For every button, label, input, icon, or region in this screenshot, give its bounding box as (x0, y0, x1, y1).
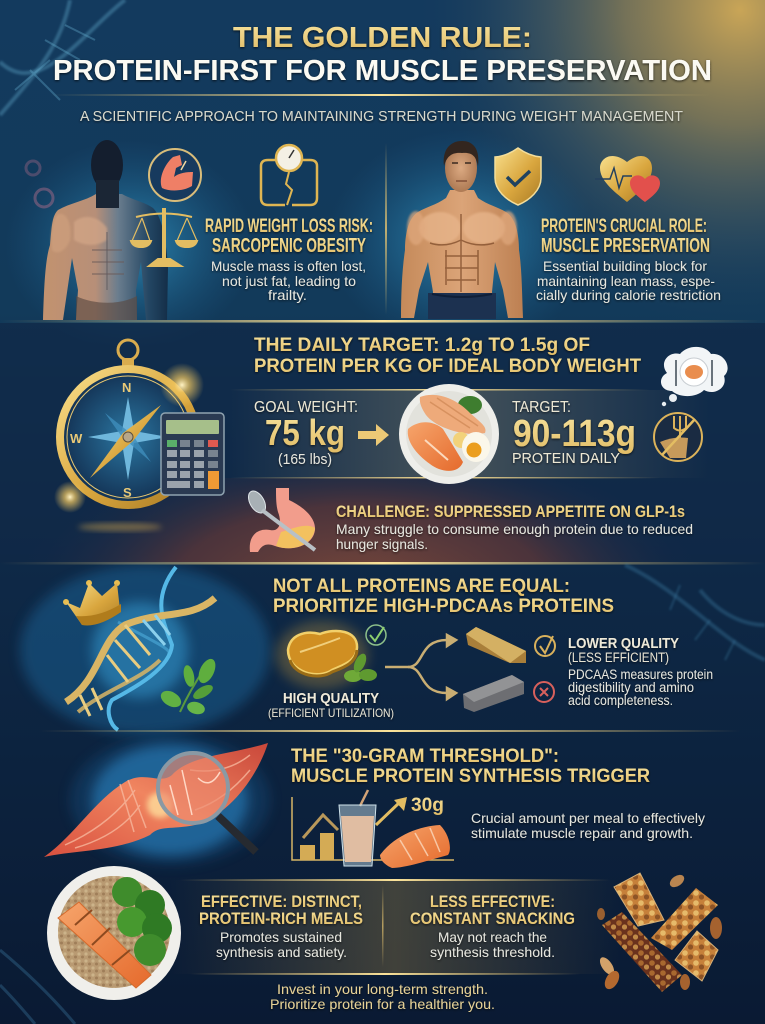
stat: target: PROTEIN DAILY (512, 450, 620, 467)
panel: rapid weight loss risk (43, 140, 373, 320)
text: threshold explanation: stimulate muscle repair and growth. (471, 825, 693, 841)
figure: shadowed man (43, 140, 168, 320)
text: protein's crucial role body: maintaining lean mass, espe- (537, 273, 715, 289)
text: challenge body: Many struggle to consume enough protein due to reduced (336, 521, 693, 537)
decorative dna bottom left (0, 950, 75, 1024)
label: lower quality (568, 635, 679, 665)
heading: less effective: CONSTANT SNACKING (410, 909, 575, 928)
heading: protein's crucial role (541, 216, 710, 257)
icon: check mark (535, 636, 555, 656)
decorative dna right (625, 565, 765, 660)
icon: balance scale (131, 208, 197, 266)
text: pdcaas explanation: PDCAAS measures protein (568, 667, 713, 682)
icon: cross mark (534, 682, 554, 702)
icon: flexed muscle in circle (149, 149, 201, 201)
text: rapid weight loss body: Muscle mass is often lost, (211, 258, 366, 274)
arrows: branching to bars (385, 635, 456, 699)
text: closing message: Invest in your long-term strength. (277, 981, 488, 997)
title: THE GOLDEN RULE: (233, 22, 532, 54)
icon: fork in hand, crossed out (654, 413, 702, 461)
icon: grey protein bar (463, 675, 524, 712)
text: rapid weight loss body (211, 258, 366, 303)
icon: snack bars and nuts (597, 872, 722, 992)
icon: high quality steak (276, 621, 386, 689)
icon: protein plate (399, 384, 499, 484)
label: lower quality: (LESS EFFICIENT) (568, 650, 669, 665)
title (53, 22, 712, 87)
panel: 30-gram threshold (44, 743, 705, 868)
stat: goal weight (254, 399, 358, 468)
panel: meal timing (47, 866, 722, 1012)
heading: rapid weight loss (205, 216, 373, 257)
icon: compass with calculator: S (123, 485, 132, 500)
chart: protein threshold (292, 790, 454, 868)
icon: stomach with spoon (245, 488, 315, 552)
icon: compass with calculator (54, 340, 224, 531)
stat: goal weight: GOAL WEIGHT: (254, 399, 358, 416)
text: challenge body: hunger signals. (336, 536, 428, 552)
panel: daily target (0, 323, 765, 563)
icon: compass with calculator: N (122, 380, 131, 395)
icon: salmon plate (47, 866, 181, 1000)
panel: protein quality (63, 565, 765, 730)
text: closing message: Prioritize protein for a healthier you. (270, 996, 495, 1012)
heading: effective (199, 892, 363, 928)
heading: less effective: LESS EFFECTIVE: (430, 892, 555, 911)
heading: effective: EFFECTIVE: DISTINCT, (201, 892, 362, 911)
text: less effective body: May not reach the (438, 929, 547, 945)
callout: appetite challenge (245, 488, 693, 552)
text: effective body: Promotes sustained (220, 929, 342, 945)
panel: protein's crucial role (401, 141, 721, 319)
icon: shield with check (495, 148, 541, 205)
text: effective body: synthesis and satiety. (216, 944, 347, 960)
text: rapid weight loss body: frailty. (268, 287, 307, 303)
text: less effective body (430, 929, 555, 960)
heading: rapid weight loss: RAPID WEIGHT LOSS RISK: (205, 216, 373, 237)
heading: 30-gram threshold (291, 746, 650, 787)
heading: proteins not equal: PRIORITIZE HIGH-PDCAAs PROTEINS (273, 596, 614, 617)
subtitle: A SCIENTIFIC APPROACH TO MAINTAINING STRENGTH DURING WEIGHT MANAGEMENT (80, 108, 683, 125)
heading: effective: PROTEIN-RICH MEALS (199, 909, 363, 928)
chart: protein threshold: 30g (411, 795, 444, 816)
icon: dna with crown and leaves (63, 567, 219, 730)
stat: goal weight: 75 kg (265, 412, 345, 453)
label: high quality: HIGH QUALITY (283, 690, 379, 707)
text: protein's crucial role body (536, 258, 721, 303)
heading: proteins not equal: NOT ALL PROTEINS ARE EQUAL: (273, 576, 570, 597)
heading: daily target: PROTEIN PER KG OF IDEAL BODY WEIGHT (254, 356, 641, 377)
text: pdcaas explanation: digestibility and amino (568, 680, 694, 695)
label: lower quality: LOWER QUALITY (568, 635, 679, 652)
heading: rapid weight loss: SARCOPENIC OBESITY (212, 235, 366, 257)
label: high quality (268, 690, 394, 720)
label: high quality: (EFFICIENT UTILIZATION) (268, 706, 394, 720)
heading: daily target (254, 335, 641, 377)
text: threshold explanation (471, 810, 705, 841)
text: rapid weight loss body: not just fat, leading to (222, 273, 356, 289)
icon: heart with pulse (595, 156, 660, 202)
icon: thought cloud with food (661, 347, 728, 406)
stat: target (512, 399, 636, 467)
decorative dna top left (0, 0, 125, 207)
text: protein's crucial role body: cially during calorie restriction (536, 287, 721, 303)
heading: 30-gram threshold: MUSCLE PROTEIN SYNTHESIS TRIGGER (291, 766, 650, 787)
callout: appetite challenge: CHALLENGE: SUPPRESSED APPETITE ON GLP-1s (336, 503, 685, 521)
heading: proteins not equal (273, 576, 614, 617)
icon: broken weighing scale (261, 145, 317, 205)
icon: gold protein bar (466, 627, 526, 663)
text: pdcaas explanation: acid completeness. (568, 693, 673, 708)
stat: target: TARGET: (512, 399, 571, 416)
text: pdcaas explanation (568, 667, 713, 708)
figure: muscular man (401, 141, 523, 319)
text: effective body (216, 929, 347, 960)
text: closing message (270, 981, 495, 1012)
icon: compass with calculator: W (70, 431, 83, 446)
stat: target: 90-113g (513, 413, 636, 455)
heading: less effective (410, 892, 575, 928)
heading: daily target: THE DAILY TARGET: 1.2g TO 1.5g OF (254, 335, 590, 356)
stat: goal weight: (165 lbs) (278, 451, 332, 468)
text: challenge body (336, 521, 693, 552)
text: threshold explanation: Crucial amount per meal to effectively (471, 810, 705, 826)
title: PROTEIN-FIRST FOR MUSCLE PRESERVATION (53, 55, 712, 87)
arrow: weight to target (358, 424, 389, 446)
heading: 30-gram threshold: THE "30-GRAM THRESHOLD": (291, 746, 559, 767)
icon: muscle under magnifier (44, 743, 268, 857)
text: less effective body: synthesis threshold. (430, 944, 555, 960)
text: protein's crucial role body: Essential building block for (543, 258, 707, 274)
